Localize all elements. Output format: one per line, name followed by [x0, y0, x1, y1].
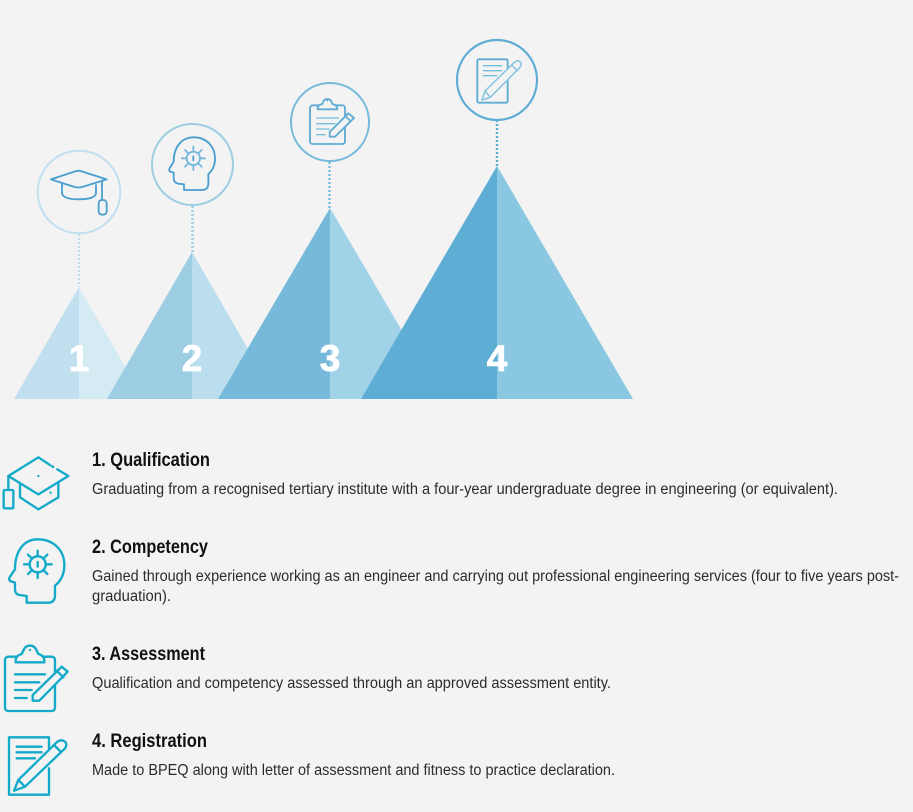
description: Graduating from a recognised tertiary institute with a four-year undergraduate degree in engineering (or equivalent).	[92, 481, 838, 498]
icon: document and pencil	[9, 737, 66, 795]
connector 2	[191, 206, 194, 252]
heading: 3. Assessment	[92, 644, 206, 665]
peak 4: 4	[487, 338, 508, 379]
icon: clipboard	[5, 646, 68, 711]
connector 1	[78, 234, 80, 287]
peak 3	[218, 208, 442, 399]
badge 3: clipboard	[291, 83, 369, 161]
description: graduation).	[92, 588, 171, 605]
peak 1: 1	[69, 338, 89, 379]
icon: graduation cap	[4, 457, 68, 509]
peak 2: 2	[182, 338, 202, 379]
heading: 2. Competency	[92, 537, 208, 558]
connector 4	[496, 120, 498, 166]
description: Made to BPEQ along with letter of assessment and fitness to practice declaration.	[92, 762, 615, 779]
heading: 4. Registration	[92, 731, 207, 752]
chart: four rising peaks	[14, 166, 633, 399]
step 4: registration	[9, 731, 615, 795]
peak 4	[361, 166, 633, 399]
peak 3: 3	[320, 338, 340, 379]
connector 3	[328, 162, 331, 208]
description: Qualification and competency assessed through an approved assessment entity.	[92, 675, 611, 692]
step 2: competency	[9, 537, 899, 605]
peak 2	[107, 252, 277, 399]
badge 4: document and pencil	[457, 40, 537, 120]
peak 1	[14, 287, 144, 399]
description	[92, 568, 899, 605]
icon: head with gear	[9, 539, 64, 603]
heading: 1. Qualification	[92, 450, 210, 471]
step 1: qualification	[4, 450, 838, 509]
badge 1: graduation cap	[38, 151, 120, 233]
badge 2: head with gear	[152, 124, 233, 205]
step 3: assessment	[5, 644, 611, 711]
